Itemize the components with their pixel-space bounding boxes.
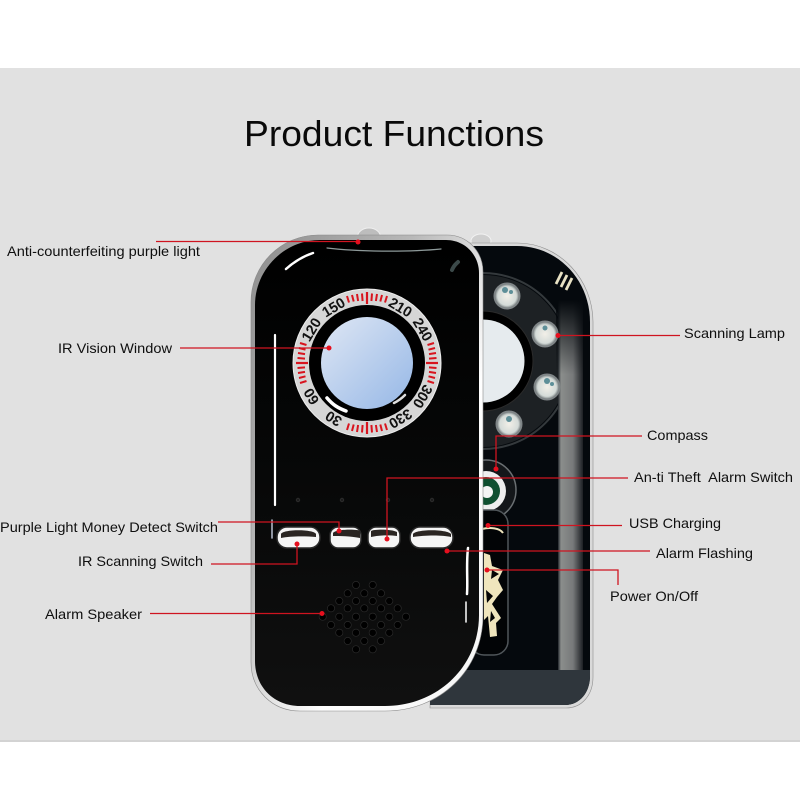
callout: Alarm Flashing	[444, 545, 753, 561]
icon: compass	[456, 460, 516, 520]
rear marks	[556, 272, 572, 290]
rear shell	[430, 243, 593, 708]
icon: rear purple light bulb	[471, 234, 491, 248]
device: open back side	[430, 234, 594, 708]
dial numbers: 210	[385, 295, 414, 321]
callout: Anti-counterfeiting purple light	[7, 240, 360, 259]
device: front side	[251, 228, 483, 711]
callout: USB Charging	[486, 515, 721, 531]
USB and power slot with pattern	[470, 510, 508, 655]
dial numbers: 30	[323, 407, 345, 429]
buttons	[277, 527, 453, 548]
gloss highlights	[272, 248, 468, 622]
scanning lamps	[494, 284, 560, 436]
title: Product Functions	[244, 113, 544, 154]
top purple light bulb	[358, 228, 380, 246]
callout: Anti Theft Alarm Switch: An-ti Theft Alarm Switch	[634, 469, 793, 485]
rear lens	[433, 311, 533, 411]
dial numbers: 300	[409, 381, 435, 410]
callout: IR Vision Window	[58, 340, 332, 356]
front shell edge	[251, 235, 483, 711]
callout: Compass: Compass	[647, 427, 708, 443]
callout: USB Charging: USB Charging	[629, 515, 721, 531]
callout: Scanning Lamp	[556, 325, 785, 341]
callout: Purple Light Money Detect Switch: Purple Light Money Detect Switch	[0, 519, 218, 535]
callout: Purple Light Money Detect Switch	[0, 519, 342, 535]
indicator holes	[296, 498, 434, 502]
callout: Scanning Lamp: Scanning Lamp	[684, 325, 785, 341]
callout: Anti Theft Alarm Switch	[384, 469, 793, 542]
dial numbers: 60	[301, 385, 323, 407]
speaker grille	[319, 581, 410, 653]
callout: Power On/Off: Power On/Off	[610, 588, 698, 604]
front black body	[255, 240, 479, 706]
dial ticks	[296, 292, 438, 434]
dial numbers: 150	[320, 295, 349, 321]
dial numbers: 120	[299, 316, 325, 345]
callout: Compass	[494, 427, 708, 472]
dial numbers: 330	[385, 405, 414, 431]
callout: Alarm Flashing: Alarm Flashing	[656, 545, 753, 561]
lens reflections	[327, 398, 346, 411]
callout: IR Vision Window: IR Vision Window	[58, 340, 173, 356]
callout: Alarm Speaker	[45, 606, 324, 622]
dial numbers: 240	[409, 316, 435, 345]
callout: Alarm Speaker: Alarm Speaker	[45, 606, 142, 622]
callout: Anti-counterfeiting purple light: Anti-counterfeiting purple light	[7, 243, 200, 259]
callout: IR Scanning Switch	[78, 542, 300, 569]
dial numbers	[299, 295, 435, 431]
callout: Power On/Off	[484, 568, 698, 604]
dial	[293, 289, 441, 437]
lamp reflections	[502, 287, 554, 422]
callout: IR Scanning Switch: IR Scanning Switch	[78, 553, 203, 569]
